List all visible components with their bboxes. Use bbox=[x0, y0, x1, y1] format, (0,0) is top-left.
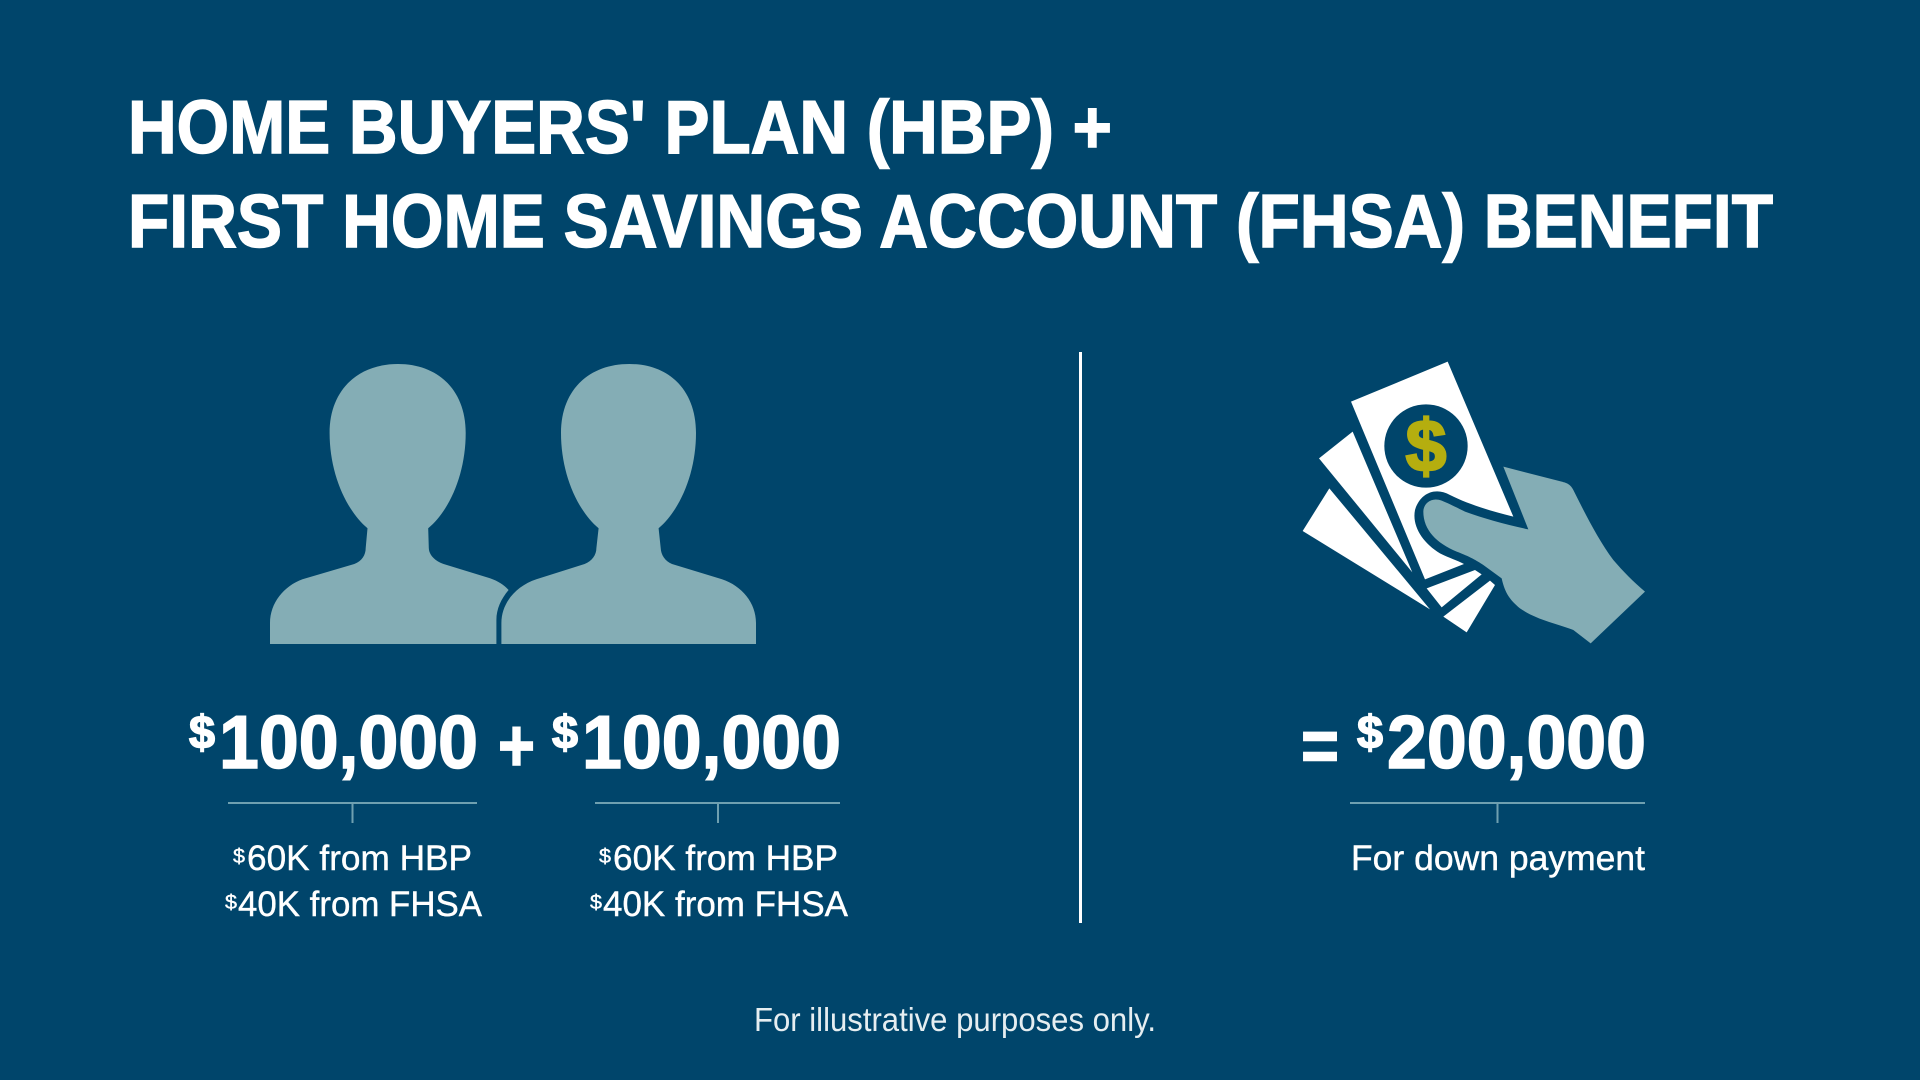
title: HOME BUYERS' PLAN (HBP) + bbox=[128, 85, 1112, 169]
left amount: second 100,000: 100,000 bbox=[582, 700, 841, 784]
breakdown: first person bbox=[225, 839, 483, 924]
vertical divider bbox=[1079, 352, 1082, 923]
breakdown: first person: $ bbox=[225, 892, 237, 914]
icon: bill fragment upper bbox=[1427, 570, 1482, 607]
breakdown: second person: 60K from HBP bbox=[613, 839, 838, 878]
total amount: 200,000 bbox=[1387, 700, 1646, 784]
breakdown: second person: $ bbox=[599, 846, 611, 868]
breakdown: first person: 40K from FHSA bbox=[238, 885, 483, 924]
icon: second bill bbox=[1319, 432, 1412, 572]
icon: main bill bbox=[1351, 362, 1513, 579]
icon: hand bbox=[1423, 467, 1645, 643]
equals sign: = bbox=[1301, 704, 1339, 787]
bracket under second amount bbox=[595, 803, 840, 823]
icon: right person bbox=[501, 364, 756, 644]
footnote: For illustrative purposes only. bbox=[754, 1001, 1156, 1038]
breakdown: second person bbox=[590, 839, 849, 924]
bracket under first amount bbox=[228, 803, 477, 823]
icon: third bill bbox=[1303, 488, 1430, 609]
icon: bill fragment lower bbox=[1443, 581, 1495, 632]
icon: left person bbox=[270, 364, 509, 644]
left amount: first 100,000: $ bbox=[189, 706, 215, 758]
breakdown: second person: $ bbox=[590, 892, 602, 914]
icon: two people silhouettes bbox=[270, 364, 756, 644]
bracket under total bbox=[1350, 803, 1645, 823]
title: FIRST HOME SAVINGS ACCOUNT (FHSA) BENEFIT bbox=[128, 179, 1773, 263]
breakdown: first person: 60K from HBP bbox=[247, 839, 472, 878]
left amount: first 100,000: 100,000 bbox=[219, 700, 478, 784]
left amount: second 100,000: $ bbox=[552, 706, 578, 758]
icon: coin circle bbox=[1384, 404, 1468, 488]
breakdown: first person: $ bbox=[233, 846, 245, 868]
breakdown: second person: 40K from FHSA bbox=[603, 885, 849, 924]
total caption: For down payment bbox=[1351, 839, 1645, 878]
plus sign: + bbox=[498, 704, 535, 787]
icon: dollar sign: $ bbox=[1406, 405, 1446, 487]
total amount: $ bbox=[1357, 706, 1383, 758]
icon: hand holding cash bbox=[1303, 362, 1645, 643]
title bbox=[128, 85, 1773, 263]
